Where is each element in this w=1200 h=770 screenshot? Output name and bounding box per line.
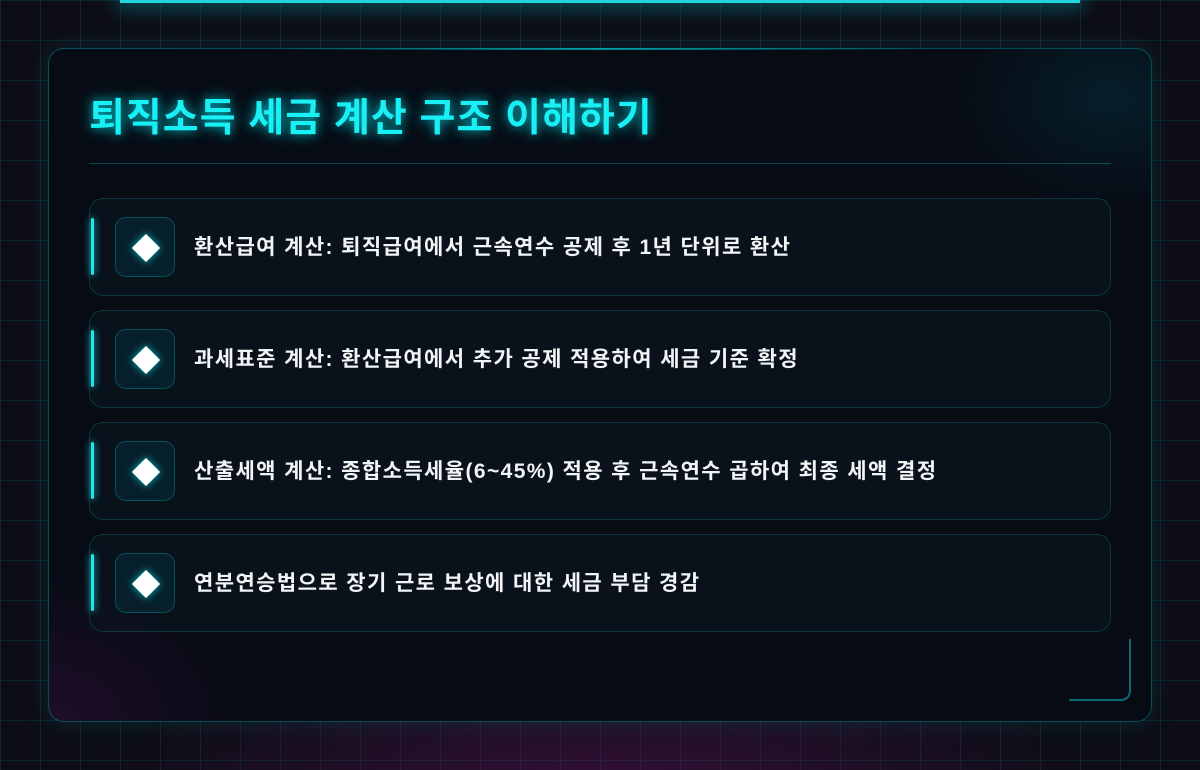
text: item 1: 환산급여 계산: 퇴직급여에서 근속연수 공제 후 1년 단위로 환산: [194, 236, 791, 259]
item 4: [89, 534, 1111, 632]
title: 퇴직소득 세금 계산 구조 이해하기: [89, 97, 653, 140]
text: item 2: 과세표준 계산: 환산급여에서 추가 공제 적용하여 세금 기준 확정: [194, 348, 799, 371]
icon: diamond: [115, 553, 175, 613]
icon: diamond: [115, 441, 175, 501]
item 3: [89, 422, 1111, 520]
icon: diamond: [115, 217, 175, 277]
item 2: [89, 310, 1111, 408]
text: item 3: 산출세액 계산: 종합소득세율(6~45%) 적용 후 근속연수 곱하여 최종 세액 결정: [194, 460, 937, 483]
icon: diamond: [115, 329, 175, 389]
corner accent: [1069, 639, 1131, 701]
item 1: [89, 198, 1111, 296]
text: item 4: 연분연승법으로 장기 근로 보상에 대한 세금 부담 경감: [194, 572, 700, 595]
